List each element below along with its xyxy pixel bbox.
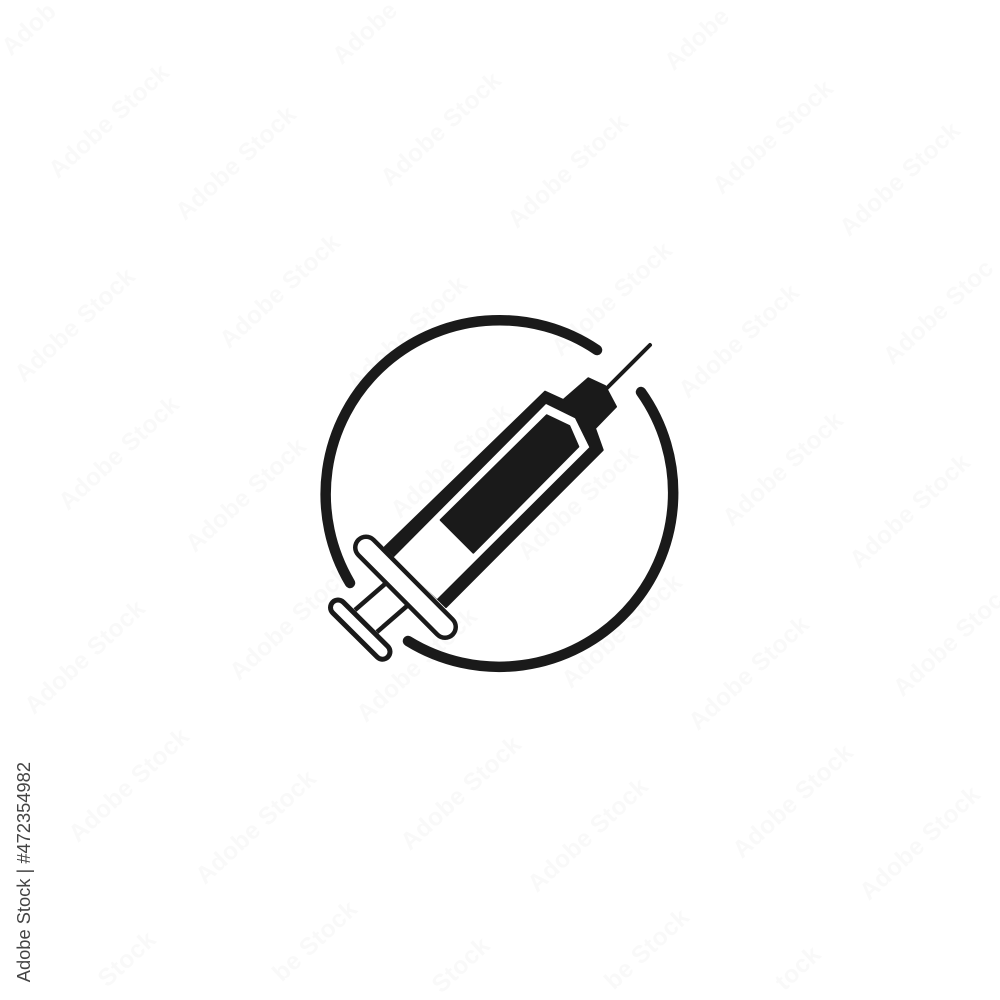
watermark pattern: Adobe Stock xyxy=(191,765,322,890)
watermark pattern: Adobe Stock xyxy=(855,781,986,906)
watermark pattern: Adobe Stock xyxy=(718,407,849,532)
circle ring: upper-left arc xyxy=(326,320,597,583)
stock image id text: Adobe Stock | #472354982 xyxy=(13,762,34,982)
watermark pattern: Adobe Stock xyxy=(547,237,678,362)
watermark pattern: Adobe Stock xyxy=(845,449,976,574)
plunger rod xyxy=(355,584,407,632)
watermark pattern: Adobe Stock xyxy=(728,739,859,864)
watermark pattern: Adobe Stock xyxy=(225,561,356,686)
watermark pattern: Adobe Stock xyxy=(513,441,644,566)
watermark pattern: Adobe Stock xyxy=(54,391,185,516)
syringe needle xyxy=(606,345,650,389)
watermark pattern: Stock xyxy=(427,932,496,999)
watermark pattern: be Stock xyxy=(268,895,363,987)
watermark pattern: Adobe Stock xyxy=(171,101,302,226)
watermark pattern: Adobe Stock xyxy=(10,263,141,388)
watermark pattern: Adobe Stock xyxy=(215,229,346,354)
syringe barrel and hub xyxy=(385,378,616,607)
watermark pattern: Adobe Stock xyxy=(396,731,527,856)
finger flange xyxy=(366,548,445,627)
watermark pattern: Stock xyxy=(93,926,162,993)
watermark pattern: Adobe Stock xyxy=(708,75,839,200)
watermark pattern: Adobe Stock xyxy=(835,117,966,242)
watermark pattern: be Stock xyxy=(600,903,695,995)
plunger thumb rest xyxy=(338,608,382,652)
barrel interior xyxy=(393,404,589,599)
watermark pattern: Adobe Stock xyxy=(342,271,473,396)
watermark pattern: Adobe Stock xyxy=(684,611,815,736)
icon: syringe in circle xyxy=(326,320,673,667)
liquid in barrel xyxy=(441,415,578,553)
watermark pattern: Adobe Stock xyxy=(376,67,507,192)
watermark pattern: Adobe Stock xyxy=(20,595,151,720)
watermark pattern: tock xyxy=(770,941,827,996)
watermark pattern: Adobe Stoc xyxy=(878,255,999,370)
watermark pattern: Adobe Stock xyxy=(181,433,312,558)
watermark pattern: Adobe Stock xyxy=(523,773,654,898)
watermark pattern: Adobe Stock xyxy=(44,59,175,184)
watermark pattern: Adobe Stock xyxy=(557,569,688,694)
watermark pattern: Adobe Stock xyxy=(64,723,195,848)
watermark pattern: Adobe Stock xyxy=(352,603,483,728)
watermark pattern: Adobe xyxy=(659,3,735,76)
watermark pattern: Adobe Stock xyxy=(674,279,805,404)
watermark pattern: Adobe Stock xyxy=(503,109,634,234)
circle ring: lower-right arc xyxy=(408,392,673,667)
watermark pattern: Adobe Stock xyxy=(386,399,517,524)
